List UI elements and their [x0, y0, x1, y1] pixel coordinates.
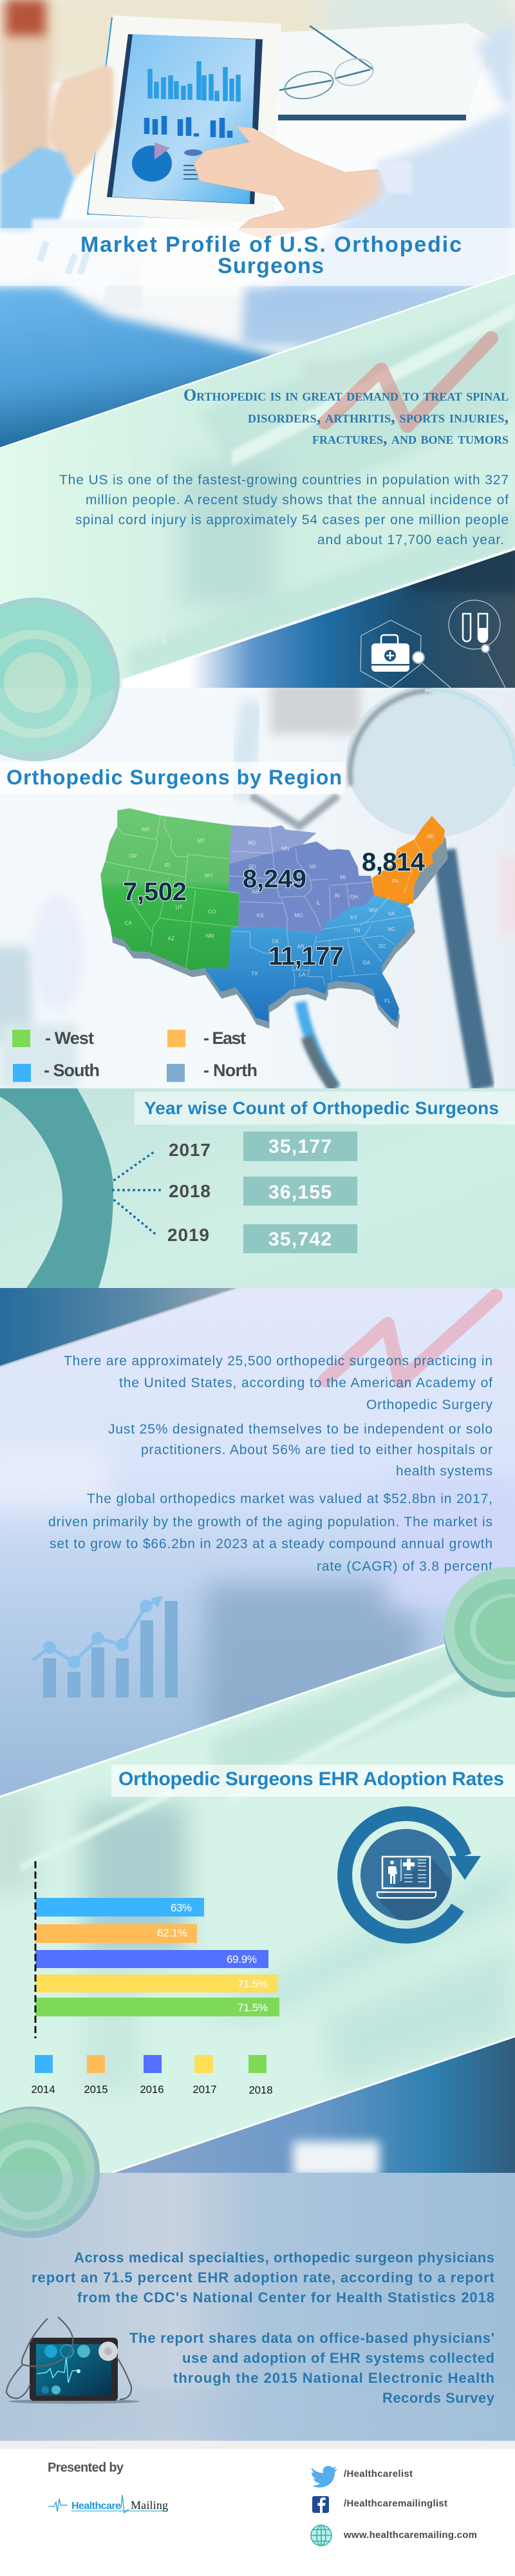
legend: years — [31, 2055, 273, 2096]
tablet — [87, 17, 281, 223]
panel: year wise count: 35,177 — [268, 1136, 332, 1157]
text: twitter handle: /Healthcarelist — [344, 2468, 413, 2479]
state labels: KY — [350, 915, 358, 921]
state labels: GA — [362, 960, 371, 966]
dotted connectors — [113, 1150, 161, 1234]
text block: surgeons count: health systems — [396, 1464, 492, 1479]
notebook with glasses — [278, 23, 492, 120]
region: West — [100, 808, 239, 971]
legend: regions: - East — [203, 1028, 246, 1048]
year rows — [167, 1140, 211, 1245]
state labels: SC — [379, 943, 386, 949]
text block: surgeons count: Just 25% designated themselves to be independent or solo — [108, 1422, 492, 1437]
state labels: TN — [353, 928, 360, 934]
legend: years: 2015 — [84, 2084, 108, 2096]
icon: EHR laptop with cycle arrow — [345, 1814, 481, 1936]
state labels: MT — [198, 838, 205, 844]
state labels: ME — [427, 834, 435, 840]
green circle decoration bottom — [0, 2107, 100, 2238]
paper chart on desk — [32, 219, 145, 309]
text block: population: million people. A recent study shows that the annual incidence of — [86, 493, 509, 507]
panel: EHR report text — [0, 2173, 515, 2441]
state labels: NM — [206, 933, 214, 939]
text block: survey: Records Survey — [382, 2390, 495, 2406]
legend: regions: - West — [45, 1028, 94, 1048]
state labels: NE — [252, 889, 259, 895]
text: presented by: Presented by — [48, 2461, 124, 2475]
text block: survey: through the 2015 National Electronic Health — [173, 2370, 494, 2386]
blurred blue sleeve foreground — [0, 281, 474, 448]
hands — [48, 64, 388, 238]
text block: survey — [129, 2330, 495, 2406]
text block: demand statement: disorders, arthritis, sports injuries, — [248, 408, 509, 426]
state labels: UT — [175, 905, 182, 911]
EHR bar chart: 69.9% — [227, 1953, 257, 1965]
US map — [100, 808, 448, 1028]
state labels: AR — [297, 944, 304, 950]
text block: surgeons count: practitioners. About 56% are tied to either hospitals or — [141, 1443, 492, 1457]
state labels: TX — [251, 971, 258, 976]
EHR bar chart: 71.5% — [238, 1978, 268, 1990]
text block: demand statement: fractures, and bone tumors — [312, 429, 509, 448]
state labels: WV — [369, 907, 378, 913]
text block: surgeons count: Orthopedic Surgery — [366, 1397, 493, 1412]
region: East — [372, 816, 445, 904]
text block: population — [59, 473, 509, 547]
count boxes — [243, 1132, 357, 1253]
panel: EHR adoption background — [0, 1610, 515, 2177]
state labels — [125, 826, 435, 1004]
icon: rising zigzag arrow — [325, 338, 491, 426]
state labels: FL — [384, 998, 391, 1004]
state labels: OR — [129, 853, 137, 859]
map region counts — [123, 848, 426, 971]
state labels: CA — [125, 920, 132, 926]
text block: surgeons count: rate (CAGR) of 3.8 percent — [317, 1559, 492, 1574]
state labels: WI — [310, 864, 316, 870]
logo: Healthcare Mailing — [48, 2495, 168, 2513]
panel: orthopedic demand — [0, 270, 515, 689]
legend: regions: - South — [44, 1061, 100, 1080]
logo: Healthcare Mailing: Healthcare — [71, 2501, 121, 2512]
text: website: www.healthcaremailing.com — [343, 2530, 477, 2541]
title: Surgeons — [218, 254, 324, 278]
text: facebook handle: /Healthcaremailinglist — [344, 2498, 447, 2509]
map region counts: 8,249 — [243, 865, 306, 893]
heading band: EHR: Orthopedic Surgeons EHR Adoption Rates — [118, 1768, 504, 1790]
EHR bar chart: 62.1% — [157, 1927, 187, 1939]
green circle decoration right — [444, 1567, 515, 1698]
text block: adoption rate — [32, 2249, 495, 2306]
map region counts: 11,177 — [268, 942, 344, 971]
text block: survey: The report shares data on office-based physicians' — [129, 2330, 494, 2346]
logo: Healthcare Mailing: Mailing — [131, 2499, 168, 2512]
text block: adoption rate: report an 71.5 percent EHR adoption rate, according to a report — [32, 2269, 495, 2286]
region: South — [204, 895, 415, 1022]
panel: market statistics — [0, 1288, 515, 1803]
panel: year wise count — [0, 1088, 515, 1288]
state labels: ID — [165, 862, 170, 868]
state labels: WA — [142, 826, 150, 832]
state labels: CO — [208, 909, 216, 914]
icon: tablet with stethoscope — [6, 2317, 140, 2403]
state labels: MO — [294, 913, 303, 918]
title: Market Profile of U.S. Orthopedic — [80, 232, 462, 257]
legend: regions: - North — [203, 1061, 258, 1080]
text block: population: spinal cord injury is approximately 54 cases per one million people — [75, 513, 509, 527]
year rows: 2017 — [169, 1140, 211, 1160]
state labels: OK — [272, 939, 279, 945]
heading band: EHR — [111, 1765, 515, 1797]
map region counts: 8,814 — [362, 848, 426, 876]
state labels: ND — [248, 840, 256, 846]
text block: surgeons count: The global orthopedics market was valued at $52.8bn in 2017, — [87, 1492, 492, 1506]
panel: year wise count: 36,155 — [268, 1182, 332, 1203]
blue triangle above last panel — [111, 2036, 515, 2177]
heading: year wise: Year wise Count of Orthopedic Surgeons — [144, 1098, 499, 1118]
state labels: AZ — [168, 936, 174, 942]
state labels: MI — [340, 875, 346, 880]
state labels: WY — [205, 873, 213, 879]
state labels: IN — [335, 893, 340, 898]
year rows: 2019 — [167, 1225, 209, 1245]
text block: surgeons count: the United States, according to the American Academy of — [119, 1376, 492, 1390]
text block: surgeons count — [48, 1354, 493, 1574]
legend: years: 2017 — [193, 2084, 216, 2096]
legend: regions — [12, 1028, 258, 1082]
year rows: 2018 — [169, 1181, 211, 1201]
icon: growth bar chart — [33, 1596, 178, 1698]
state labels: NC — [388, 926, 395, 932]
stethoscope tubing — [251, 795, 338, 826]
state labels: VA — [388, 911, 395, 917]
legend: years: 2016 — [140, 2084, 164, 2096]
panel: dark medical icons strip — [122, 547, 515, 689]
title band — [0, 228, 515, 286]
text block: surgeons count: driven primarily by the growth of the aging population. The market is — [48, 1515, 492, 1530]
state labels: IL — [317, 900, 321, 906]
icon: twitter — [312, 2466, 337, 2488]
heading band: by region: Orthopedic Surgeons by Region — [6, 766, 342, 789]
state labels: OH — [350, 894, 358, 900]
state borders — [106, 815, 423, 987]
icon: test tubes in circle — [449, 600, 505, 688]
sleeves — [0, 19, 515, 322]
title — [80, 232, 462, 278]
EHR bar chart: 71.5% — [238, 2002, 268, 2014]
text block: survey: use and adoption of EHR systems collected — [182, 2350, 494, 2366]
text block: surgeons count: There are approximately 25,500 orthopedic surgeons practicing in — [64, 1354, 492, 1368]
panel: footer — [0, 2441, 515, 2576]
teal circle decoration top — [0, 598, 120, 761]
map shadow — [102, 837, 448, 1028]
state labels: PA — [392, 878, 399, 884]
text block: population: and about 17,700 each year. — [317, 533, 504, 547]
heading band: by region — [0, 762, 345, 794]
teal ring — [0, 1088, 113, 1288]
state labels: SD — [248, 864, 256, 870]
icon: rising zigzag arrow pale — [325, 1296, 496, 1381]
state labels: MN — [281, 846, 290, 851]
hero photo: tablet with charts held in hands — [0, 0, 515, 464]
EHR bar chart: 63% — [171, 1902, 192, 1914]
icon: facebook — [312, 2496, 329, 2513]
icon: first aid kit in hexagon — [360, 620, 451, 688]
map region counts: 7,502 — [123, 878, 187, 906]
text block: adoption rate: from the CDC's National Center for Health Statistics 2018 — [77, 2289, 494, 2306]
text block: surgeons count: set to grow to $66.2bn in 2023 at a steady compound annual growth — [50, 1537, 492, 1551]
icon: globe — [311, 2525, 332, 2546]
EHR bar chart — [35, 1861, 279, 2038]
text block: demand statement: Orthopedic is in great demand to treat spinal — [183, 386, 509, 404]
state labels: KS — [257, 913, 264, 918]
legend: years: 2014 — [31, 2084, 55, 2096]
text block: adoption rate: Across medical specialties, orthopedic surgeon physicians — [74, 2249, 494, 2266]
magnifying glass — [346, 685, 515, 1088]
legend: years: 2018 — [248, 2085, 273, 2096]
panel: orthopedic surgeons by region background — [0, 683, 515, 1088]
text block: demand statement — [183, 386, 509, 448]
text block: population: The US is one of the fastest-growing countries in population with 327 — [59, 473, 509, 488]
panel: year wise count: 35,742 — [268, 1229, 332, 1250]
region: North — [229, 826, 374, 934]
state labels: LA — [299, 972, 306, 978]
